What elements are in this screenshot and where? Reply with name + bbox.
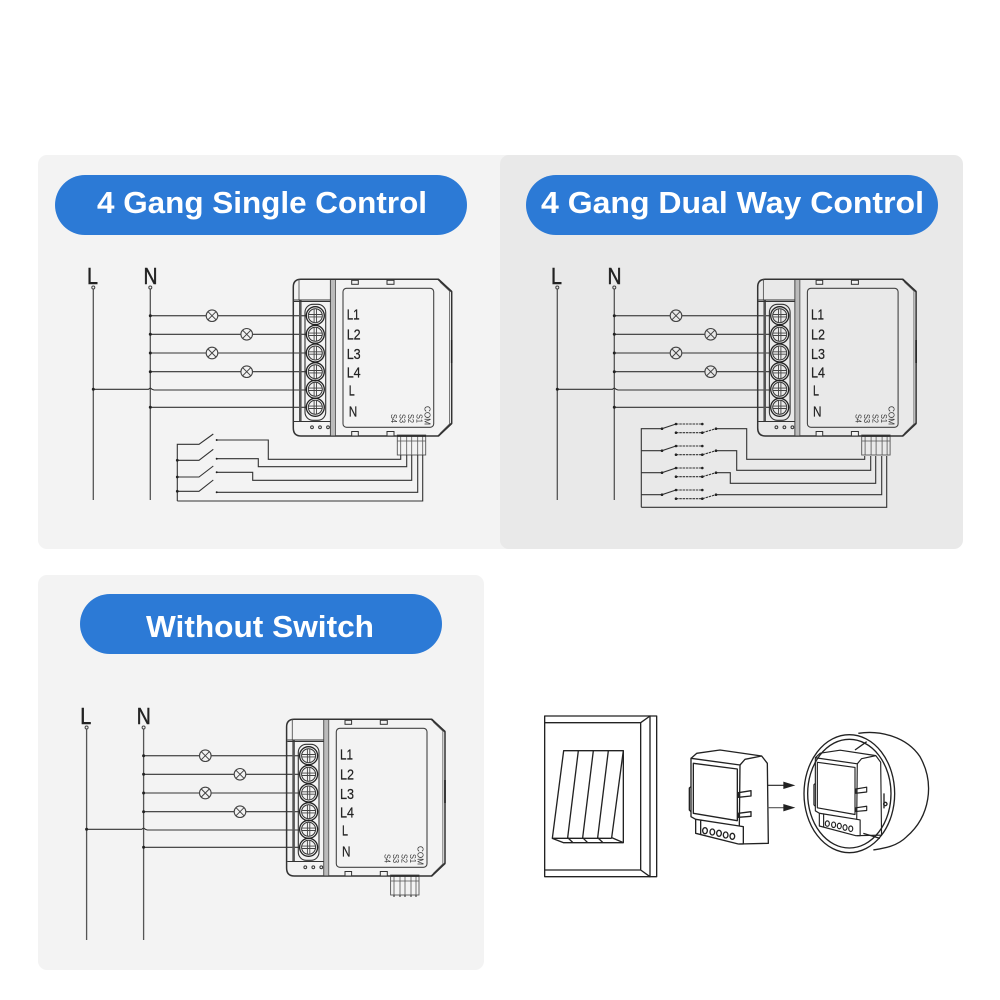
switch module: S4 <box>389 414 399 423</box>
icon: wall switch plate <box>545 716 657 877</box>
wiring diagram: without switch <box>80 703 445 940</box>
icon: relay module <box>689 750 768 844</box>
arrows: insert module into box <box>767 782 795 811</box>
wall switches and wiring <box>176 434 423 501</box>
mains lines and lamps <box>85 726 299 940</box>
switch module: L <box>342 824 348 840</box>
heading pill: 4 gang dual way control <box>526 175 938 235</box>
L and N mains labels <box>80 703 151 729</box>
switch module <box>293 279 452 455</box>
switch module: L1 <box>811 307 824 323</box>
switch module: L4 <box>811 366 825 382</box>
switch module: N <box>349 405 357 421</box>
switch module <box>287 719 445 897</box>
switch module: S3 <box>391 854 401 863</box>
switch module: L4 <box>347 366 361 382</box>
switch module: S2 <box>870 414 880 423</box>
switch module: L3 <box>340 787 354 803</box>
switch module: COM <box>887 406 897 425</box>
L and N mains labels: L <box>551 263 562 289</box>
switch module: S1 <box>408 854 418 863</box>
switch module: S4 <box>382 854 392 863</box>
mains lines and lamps <box>556 286 770 500</box>
switch module: COM <box>416 846 426 865</box>
switch module: L3 <box>347 347 361 363</box>
switch module: N <box>813 405 822 421</box>
switch module: S3 <box>862 414 872 423</box>
panel: without switch <box>38 575 484 970</box>
switch module: L2 <box>347 327 361 343</box>
switch module: S4 <box>853 414 863 423</box>
switch module: L <box>349 384 355 400</box>
heading pill: 4 gang single control: 4 Gang Single Control <box>97 185 427 220</box>
switch module: L2 <box>811 327 825 343</box>
wiring diagram: dual way control <box>551 263 916 507</box>
two-way switches and wiring <box>641 423 887 507</box>
L and N mains labels: L <box>87 263 98 289</box>
switch module: L1 <box>347 307 360 323</box>
switch module: S1 <box>415 414 425 423</box>
switch module: L2 <box>340 767 354 783</box>
switch module <box>758 279 916 455</box>
L and N mains labels: N <box>608 263 622 289</box>
panel: 4 gang single control <box>38 155 518 549</box>
switch module: S2 <box>406 414 416 423</box>
L and N mains labels: N <box>144 263 158 289</box>
switch module: L <box>813 384 819 400</box>
switch module: L4 <box>340 806 354 822</box>
wiring diagram: single control <box>87 263 452 501</box>
switch module: COM <box>422 406 432 425</box>
switch module: N <box>342 845 350 861</box>
heading pill: without switch <box>80 594 442 654</box>
panel: 4 gang dual way control <box>500 155 963 549</box>
switch module: L3 <box>811 347 825 363</box>
switch module: S2 <box>399 854 409 863</box>
mains lines and lamps <box>92 286 306 500</box>
L and N mains labels <box>87 263 158 289</box>
L and N mains labels: L <box>80 703 91 729</box>
switch module: S3 <box>398 414 408 423</box>
L and N mains labels: N <box>137 703 151 729</box>
switch module: S1 <box>879 414 889 423</box>
installation illustration <box>545 716 929 877</box>
switch module: L1 <box>340 747 353 763</box>
L and N mains labels <box>551 263 622 289</box>
heading pill: without switch: Without Switch <box>146 609 374 644</box>
heading pill: 4 gang single control <box>55 175 467 235</box>
heading pill: 4 gang dual way control: 4 Gang Dual Way Control <box>541 185 924 220</box>
icon: wall box with module inside <box>804 733 929 853</box>
